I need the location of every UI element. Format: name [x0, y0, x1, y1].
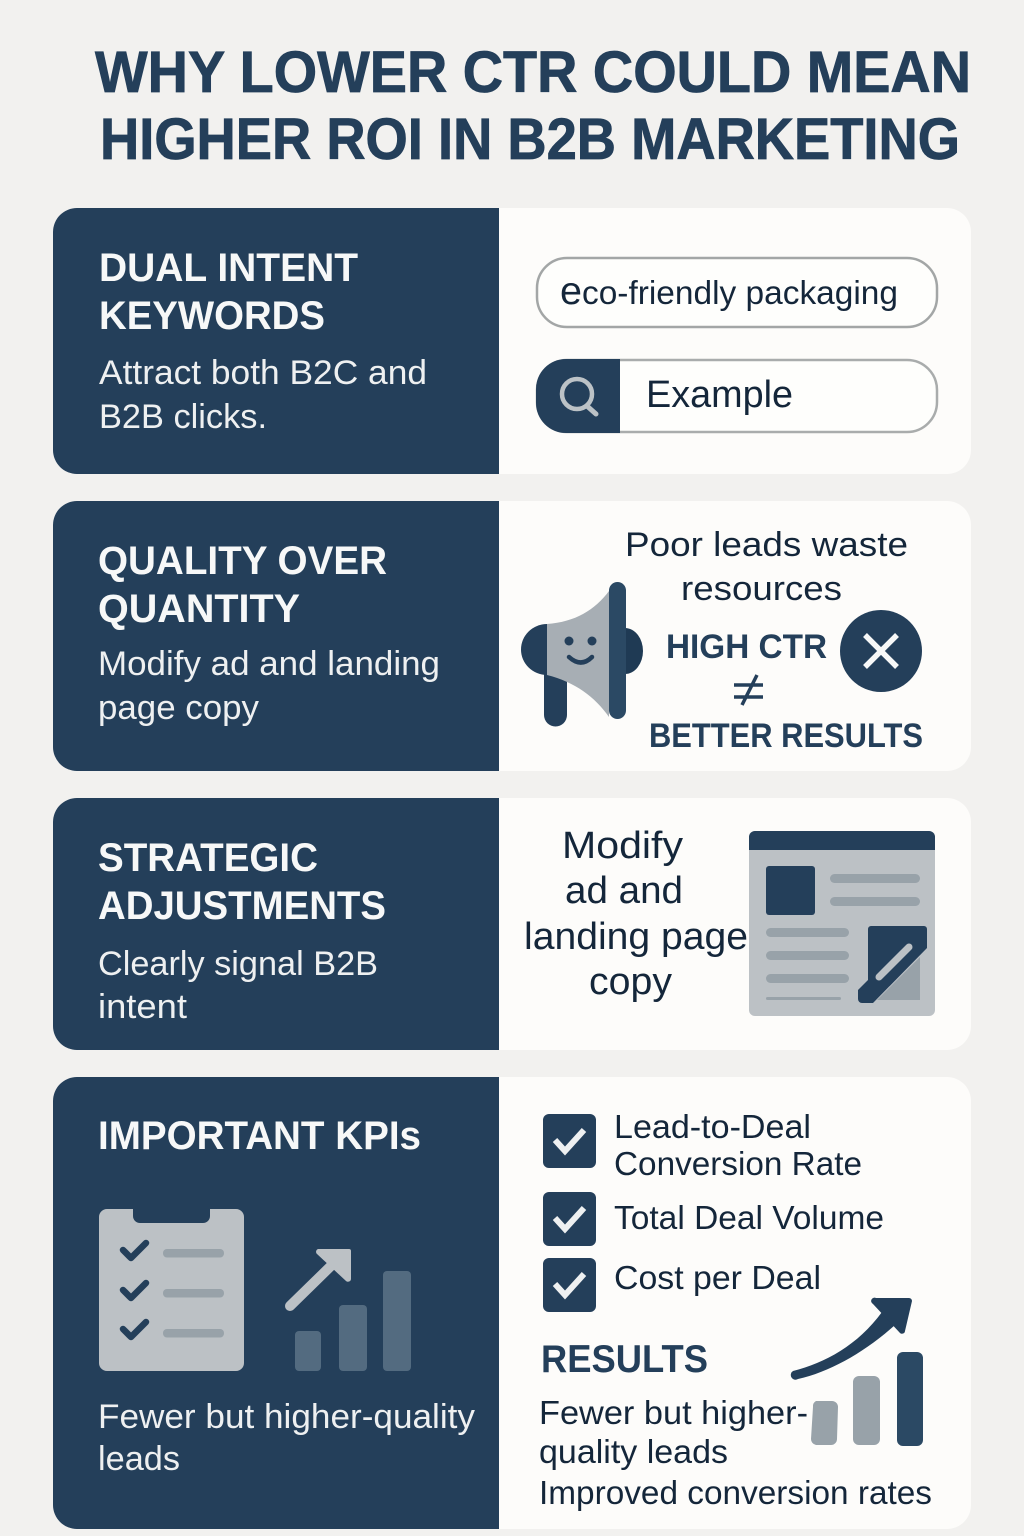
text: better results: BETTER RESULTS	[649, 717, 923, 755]
search box: keyword: eco-friendly packaging	[560, 270, 898, 313]
not-equal sign	[734, 675, 763, 705]
heading: STRATEGIC	[98, 836, 318, 880]
description: Attract both B2C and	[99, 354, 427, 392]
text: poor leads waste resources: resources	[681, 570, 842, 608]
description: B2B clicks.	[99, 398, 267, 436]
checkbox 2	[543, 1192, 596, 1246]
title	[95, 40, 971, 172]
results text: Improved conversion rates	[539, 1474, 932, 1511]
search box: example: Example	[646, 374, 793, 416]
results text	[539, 1394, 932, 1511]
panel background: content side	[53, 798, 971, 1050]
text: modify ad and landing page copy: landing page	[524, 916, 748, 958]
description: leads	[98, 1440, 180, 1478]
description: Clearly signal B2B	[98, 945, 378, 983]
text: modify ad and landing page copy: ad and	[565, 870, 683, 912]
description	[98, 945, 378, 1026]
text: modify ad and landing page copy: Modify	[562, 825, 683, 867]
panel: quality over quantity	[53, 501, 971, 771]
panel background: content side	[53, 1077, 971, 1529]
heading: IMPORTANT KPIs	[98, 1114, 421, 1158]
heading: QUALITY OVER	[98, 539, 387, 583]
title: HIGHER ROI IN B2B MARKETING	[100, 107, 960, 172]
text: high ctr: HIGH CTR	[666, 628, 827, 666]
description: Fewer but higher-quality	[98, 1398, 475, 1436]
panel: important KPIs	[53, 1077, 971, 1529]
icon: landing page with pencil	[749, 831, 935, 1016]
search box: example	[536, 359, 937, 433]
panel background: heading side	[53, 501, 499, 771]
panel background: heading side	[53, 1077, 499, 1529]
KPI: lead-to-deal conversion rate: Lead-to-Deal	[614, 1108, 811, 1145]
heading: QUANTITY	[98, 587, 300, 631]
search box: keyword	[537, 258, 937, 327]
KPI: cost per deal: Cost per Deal	[614, 1259, 821, 1296]
panel background: heading side	[53, 798, 499, 1050]
description: page copy	[98, 689, 259, 727]
panel background: content side	[53, 501, 971, 771]
icon: rising bars with arrow	[290, 1249, 411, 1371]
KPI checklist	[543, 1108, 884, 1312]
results heading: RESULTS	[541, 1338, 708, 1381]
description	[99, 354, 427, 436]
results text: quality leads	[539, 1433, 728, 1470]
title: WHY LOWER CTR COULD MEAN	[95, 40, 971, 105]
icon: magnifying glass	[562, 379, 596, 414]
results text: Fewer but higher-	[539, 1394, 808, 1431]
description: Modify ad and landing	[98, 645, 440, 683]
checkbox 3	[543, 1258, 596, 1312]
KPI: total deal volume: Total Deal Volume	[614, 1199, 884, 1236]
icon: x in circle	[840, 610, 922, 692]
description: intent	[98, 988, 188, 1026]
checkbox 1	[543, 1114, 596, 1168]
text: modify ad and landing page copy	[524, 825, 748, 1003]
chart: rising bars with curved arrow	[791, 1298, 923, 1446]
heading: ADJUSTMENTS	[98, 884, 386, 928]
panel: strategic adjustments	[53, 798, 971, 1050]
text: modify ad and landing page copy: copy	[589, 961, 672, 1003]
icon: megaphone	[521, 582, 643, 727]
icon: clipboard checklist	[99, 1209, 244, 1371]
heading	[98, 539, 387, 631]
KPI: lead-to-deal conversion rate	[614, 1108, 862, 1182]
heading	[98, 836, 386, 928]
KPI: lead-to-deal conversion rate: Conversion Rate	[614, 1145, 862, 1182]
panel: dual intent keywords	[53, 208, 971, 474]
panel background: content side	[53, 208, 971, 474]
panel background: heading side	[53, 208, 499, 474]
text: poor leads waste resources	[625, 526, 908, 608]
heading: DUAL INTENT	[99, 246, 358, 290]
heading: KEYWORDS	[99, 294, 325, 338]
heading	[99, 246, 358, 338]
description	[98, 1398, 475, 1478]
text: poor leads waste resources: Poor leads waste	[625, 526, 908, 564]
description	[98, 645, 440, 727]
